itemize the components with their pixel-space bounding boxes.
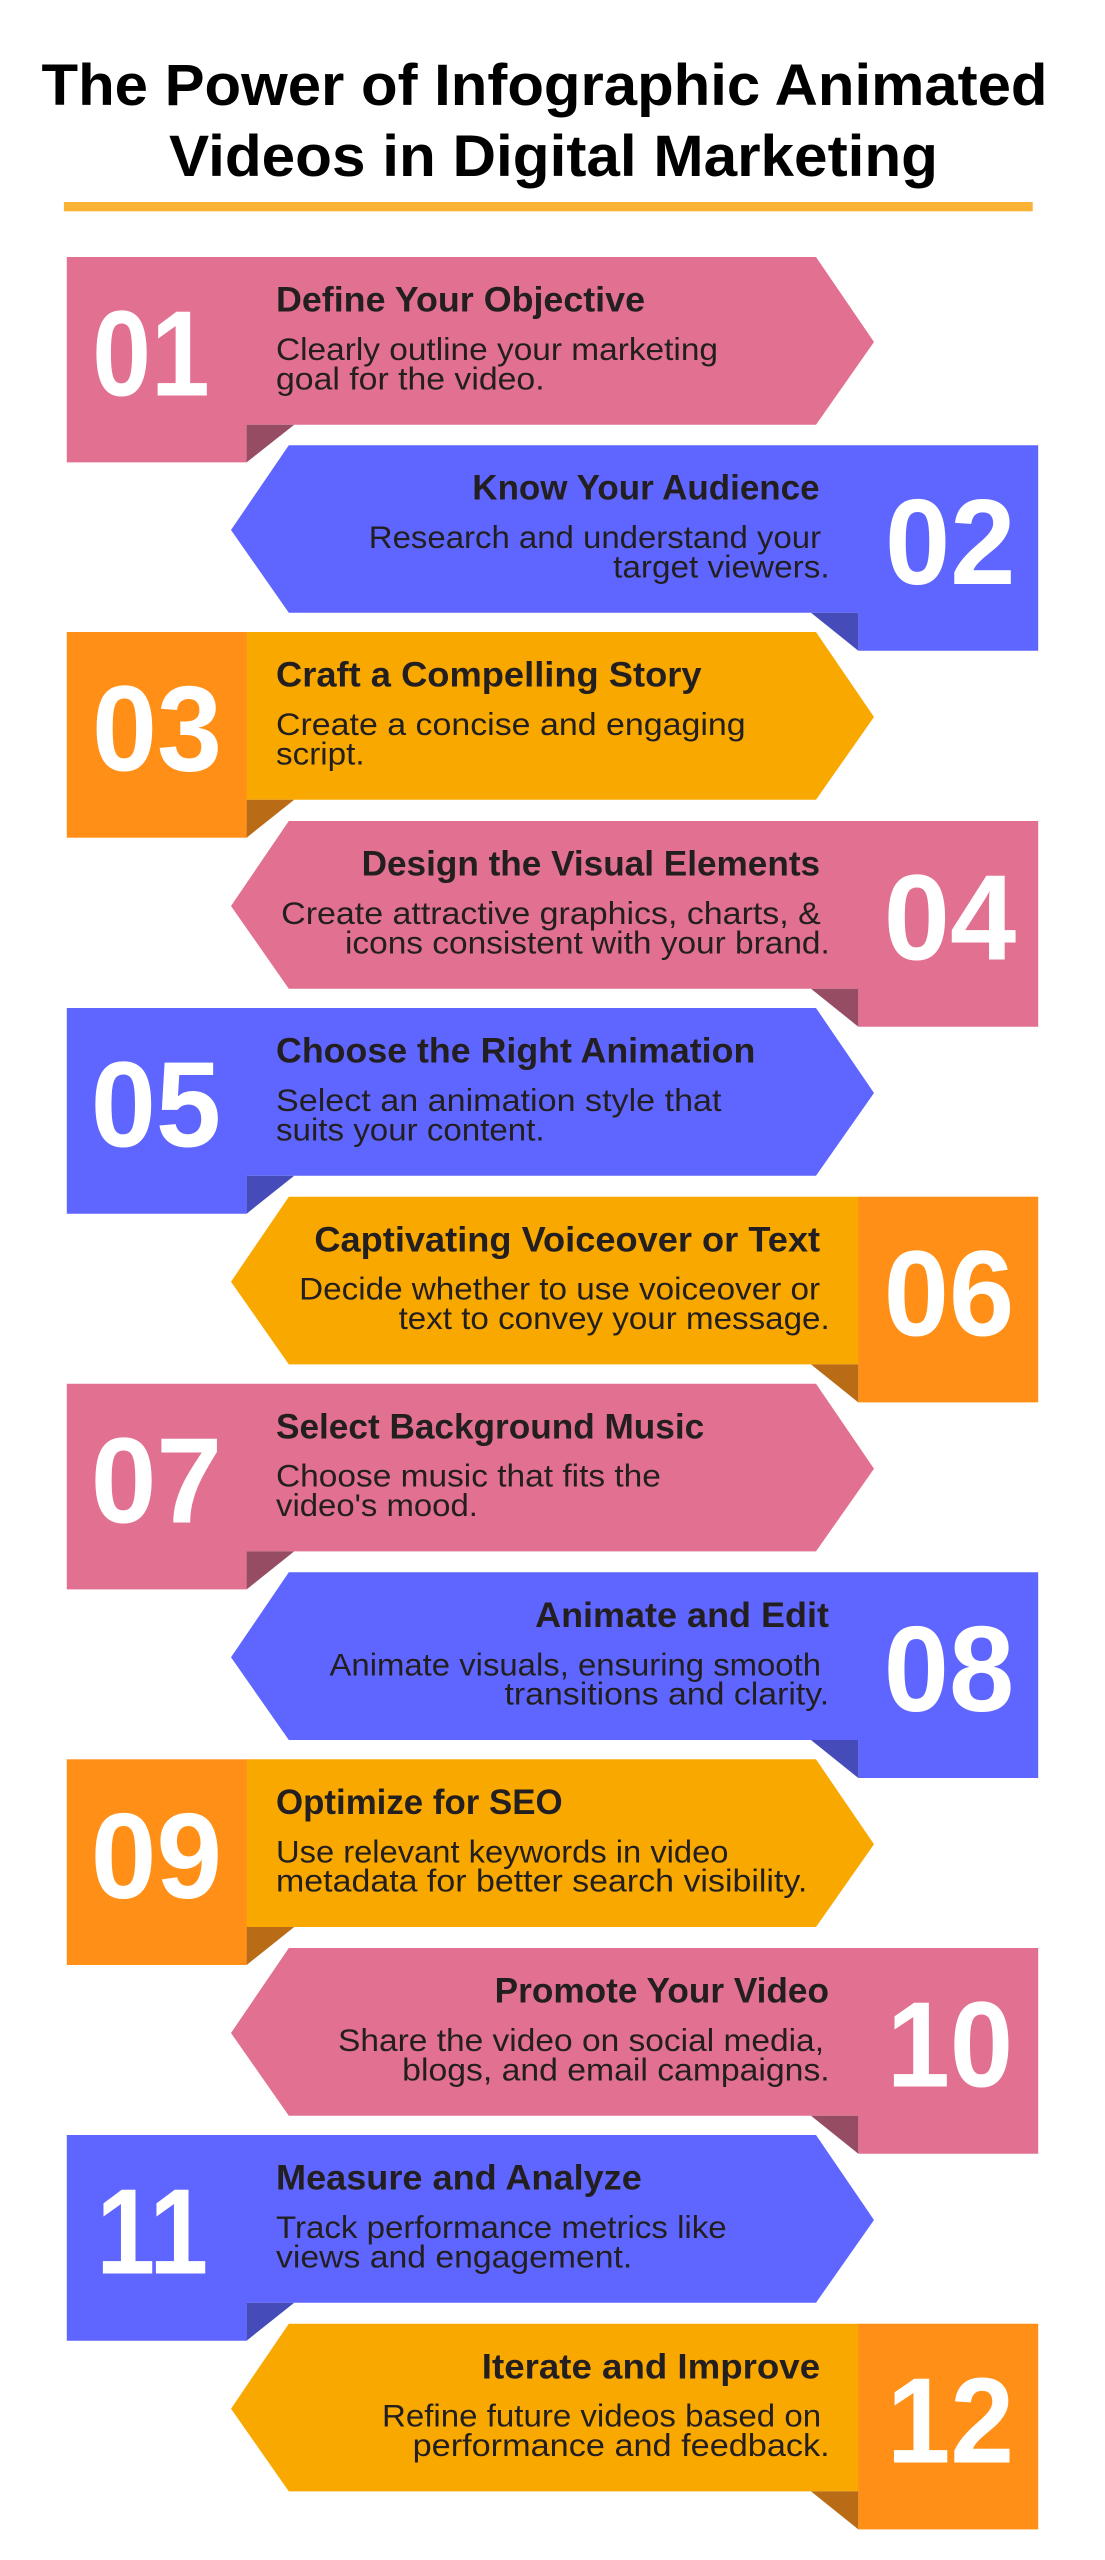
ribbon shape xyxy=(231,1948,1038,2154)
description xyxy=(276,1833,807,1899)
description xyxy=(276,706,746,771)
title: The Power of Infographic Animated xyxy=(42,53,1048,118)
heading: Animate and Edit xyxy=(535,1596,829,1635)
description: suits your content. xyxy=(276,1111,545,1147)
title xyxy=(42,53,1048,189)
number 02: 02 xyxy=(885,474,1016,610)
heading: Choose the Right Animation xyxy=(276,1032,755,1071)
description: performance and feedback. xyxy=(413,2427,830,2463)
heading: Promote Your Video xyxy=(495,1972,829,2011)
ribbon shape xyxy=(231,445,1038,651)
description xyxy=(276,1082,722,1147)
description: Track performance metrics like xyxy=(276,2209,727,2245)
heading: Design the Visual Elements xyxy=(362,845,820,884)
description: Decide whether to use voiceover or xyxy=(299,1271,820,1307)
description: script. xyxy=(276,735,365,771)
number 06: 06 xyxy=(884,1225,1014,1361)
heading: Measure and Analyze xyxy=(276,2159,642,2198)
heading: Captivating Voiceover or Text xyxy=(314,1220,820,1259)
ribbon fold xyxy=(811,613,858,651)
step 12: iterate and improve xyxy=(231,2324,1038,2529)
ribbon fold xyxy=(247,800,294,838)
title: Videos in Digital Marketing xyxy=(169,124,938,189)
description xyxy=(338,2022,830,2087)
ribbon fold xyxy=(811,2491,858,2529)
heading: Optimize for SEO xyxy=(276,1783,563,1822)
step 09: optimize for seo xyxy=(67,1759,874,1965)
number 08: 08 xyxy=(884,1601,1014,1737)
step 04: design the visual elements xyxy=(231,821,1038,1027)
ribbon shape xyxy=(231,1572,1038,1778)
number 09: 09 xyxy=(91,1788,222,1924)
description: Use relevant keywords in video xyxy=(276,1833,728,1869)
ribbon fold xyxy=(811,989,858,1027)
ribbon shape xyxy=(231,2324,859,2491)
description: Choose music that fits the xyxy=(276,1458,661,1494)
description xyxy=(330,1646,829,1712)
heading: Craft a Compelling Story xyxy=(276,656,702,695)
description: Refine future videos based on xyxy=(382,2398,821,2434)
step 06: captivating voiceover or text xyxy=(231,1197,1038,1402)
step 03: craft a compelling story xyxy=(67,632,874,838)
description: views and engagement. xyxy=(276,2238,632,2274)
ribbon fold xyxy=(247,1176,294,1214)
ribbon shape xyxy=(67,257,874,462)
ribbon fold xyxy=(811,1740,858,1778)
step 07: select background music xyxy=(67,1384,874,1589)
description: Research and understand your xyxy=(369,519,821,555)
step 05: choose the right animation xyxy=(67,1008,874,1214)
ribbon shape xyxy=(246,632,874,800)
description: video's mood. xyxy=(276,1487,478,1523)
number block xyxy=(67,1759,247,1965)
ribbon fold xyxy=(247,1551,294,1589)
step 02: know your audience xyxy=(231,445,1038,651)
number 01: 01 xyxy=(92,286,210,422)
description xyxy=(299,1271,830,1336)
description: blogs, and email campaigns. xyxy=(402,2051,830,2087)
ribbon fold xyxy=(247,1927,294,1965)
ribbon shape xyxy=(67,1384,874,1589)
ribbon shape xyxy=(246,1759,874,1927)
description: text to convey your message. xyxy=(399,1300,830,1336)
number 11: 11 xyxy=(96,2164,208,2300)
number block xyxy=(67,632,247,838)
heading: Iterate and Improve xyxy=(482,2347,820,2386)
description: icons consistent with your brand. xyxy=(345,924,830,960)
description xyxy=(276,2209,727,2274)
number 04: 04 xyxy=(884,850,1016,986)
heading: Define Your Objective xyxy=(276,281,645,320)
description: Clearly outline your marketing xyxy=(276,331,718,367)
title underline xyxy=(64,202,1033,211)
ribbon fold xyxy=(247,425,294,462)
description: goal for the video. xyxy=(276,360,545,396)
number 07: 07 xyxy=(91,1412,222,1548)
description: Create a concise and engaging xyxy=(276,706,746,742)
step 11: measure and analyze xyxy=(67,2135,874,2341)
number block xyxy=(858,2324,1038,2529)
number 10: 10 xyxy=(887,1977,1013,2113)
description: Create attractive graphics, charts, & xyxy=(281,895,821,931)
ribbon fold xyxy=(811,2116,858,2154)
ribbon shape xyxy=(231,1197,859,1364)
description: transitions and clarity. xyxy=(504,1676,829,1712)
number 05: 05 xyxy=(91,1037,221,1173)
description xyxy=(382,2398,830,2463)
ribbon shape xyxy=(231,821,1038,1027)
ribbon shape xyxy=(67,1008,874,1214)
ribbon fold xyxy=(811,1364,858,1402)
description: metadata for better search visibility. xyxy=(276,1863,807,1899)
heading: Know Your Audience xyxy=(472,469,820,508)
step 10: promote your video xyxy=(231,1948,1038,2154)
description: Select an animation style that xyxy=(276,1082,722,1118)
ribbon shape xyxy=(67,2135,874,2341)
description: Animate visuals, ensuring smooth xyxy=(330,1646,821,1682)
number block xyxy=(858,1197,1038,1402)
heading: Select Background Music xyxy=(276,1407,704,1446)
ribbon fold xyxy=(247,2303,294,2341)
step 01: define your objective xyxy=(67,257,874,462)
description xyxy=(369,519,830,584)
step 08: animate and edit xyxy=(231,1572,1038,1778)
number 12: 12 xyxy=(887,2352,1014,2488)
description: Share the video on social media, xyxy=(338,2022,824,2058)
description xyxy=(276,331,718,396)
description xyxy=(281,895,830,960)
number 03: 03 xyxy=(92,661,222,797)
description xyxy=(276,1458,661,1523)
description: target viewers. xyxy=(613,548,830,584)
